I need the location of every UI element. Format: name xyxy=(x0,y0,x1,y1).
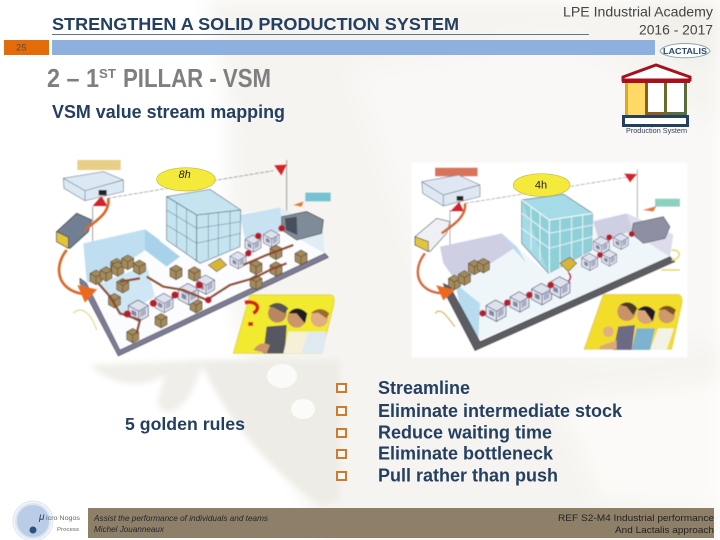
bullet list: golden rules xyxy=(337,377,623,486)
text: 5 golden rules: 5 golden rules xyxy=(125,414,245,434)
illustration: 4h future state factory xyxy=(412,163,687,358)
footer bar: Assist the performance of individuals and teams xyxy=(93,513,269,523)
heading: ST xyxy=(99,66,116,81)
label: 8h ellipse: 8h xyxy=(179,169,191,181)
footer bar: And Lactalis approach xyxy=(615,525,714,536)
logo: Micro Nogos: icro Nogos xyxy=(46,516,80,522)
bullet list: golden rules: Pull rather than push xyxy=(378,464,558,486)
logo: Micro Nogos xyxy=(13,501,80,540)
title: STRENGTHEN A SOLID PRODUCTION SYSTEM xyxy=(52,14,459,34)
icon: production system house: Production System xyxy=(626,126,687,135)
logo: Lactalis xyxy=(660,44,710,58)
logo: Lactalis: LACTALIS xyxy=(663,47,708,56)
footer bar xyxy=(88,508,714,538)
footer bar: Michel Jouanneaux xyxy=(94,524,165,534)
logo: Micro Nogos: μ xyxy=(38,512,45,523)
label: 4h ellipse: 4h xyxy=(535,179,547,191)
page number tab: 25 xyxy=(16,42,27,54)
label: 4h ellipse xyxy=(513,174,570,196)
bullet list: golden rules: Eliminate bottleneck xyxy=(378,442,554,464)
heading xyxy=(47,63,271,93)
bullet list: golden rules: Streamline xyxy=(378,377,470,398)
header: academy label: 2016 - 2017 xyxy=(639,22,713,38)
illustration: 8h current state factory xyxy=(57,160,334,356)
icon: production system house xyxy=(622,65,690,135)
header: academy label xyxy=(563,4,713,38)
page number tab xyxy=(4,40,49,55)
header: academy label: LPE Industrial Academy xyxy=(563,4,713,20)
blue header bar xyxy=(52,40,655,55)
heading: 2 – 1 xyxy=(47,63,99,93)
label: 8h ellipse xyxy=(157,168,215,191)
logo: Micro Nogos: Process xyxy=(57,527,80,533)
bullet list: golden rules: Eliminate intermediate stock xyxy=(378,400,623,421)
bullet list: golden rules: Reduce waiting time xyxy=(378,422,552,442)
subheading: VSM value stream mapping xyxy=(52,101,285,122)
heading: PILLAR - VSM xyxy=(123,63,271,93)
footer bar: REF S2-M4 Industrial performance xyxy=(558,513,714,524)
